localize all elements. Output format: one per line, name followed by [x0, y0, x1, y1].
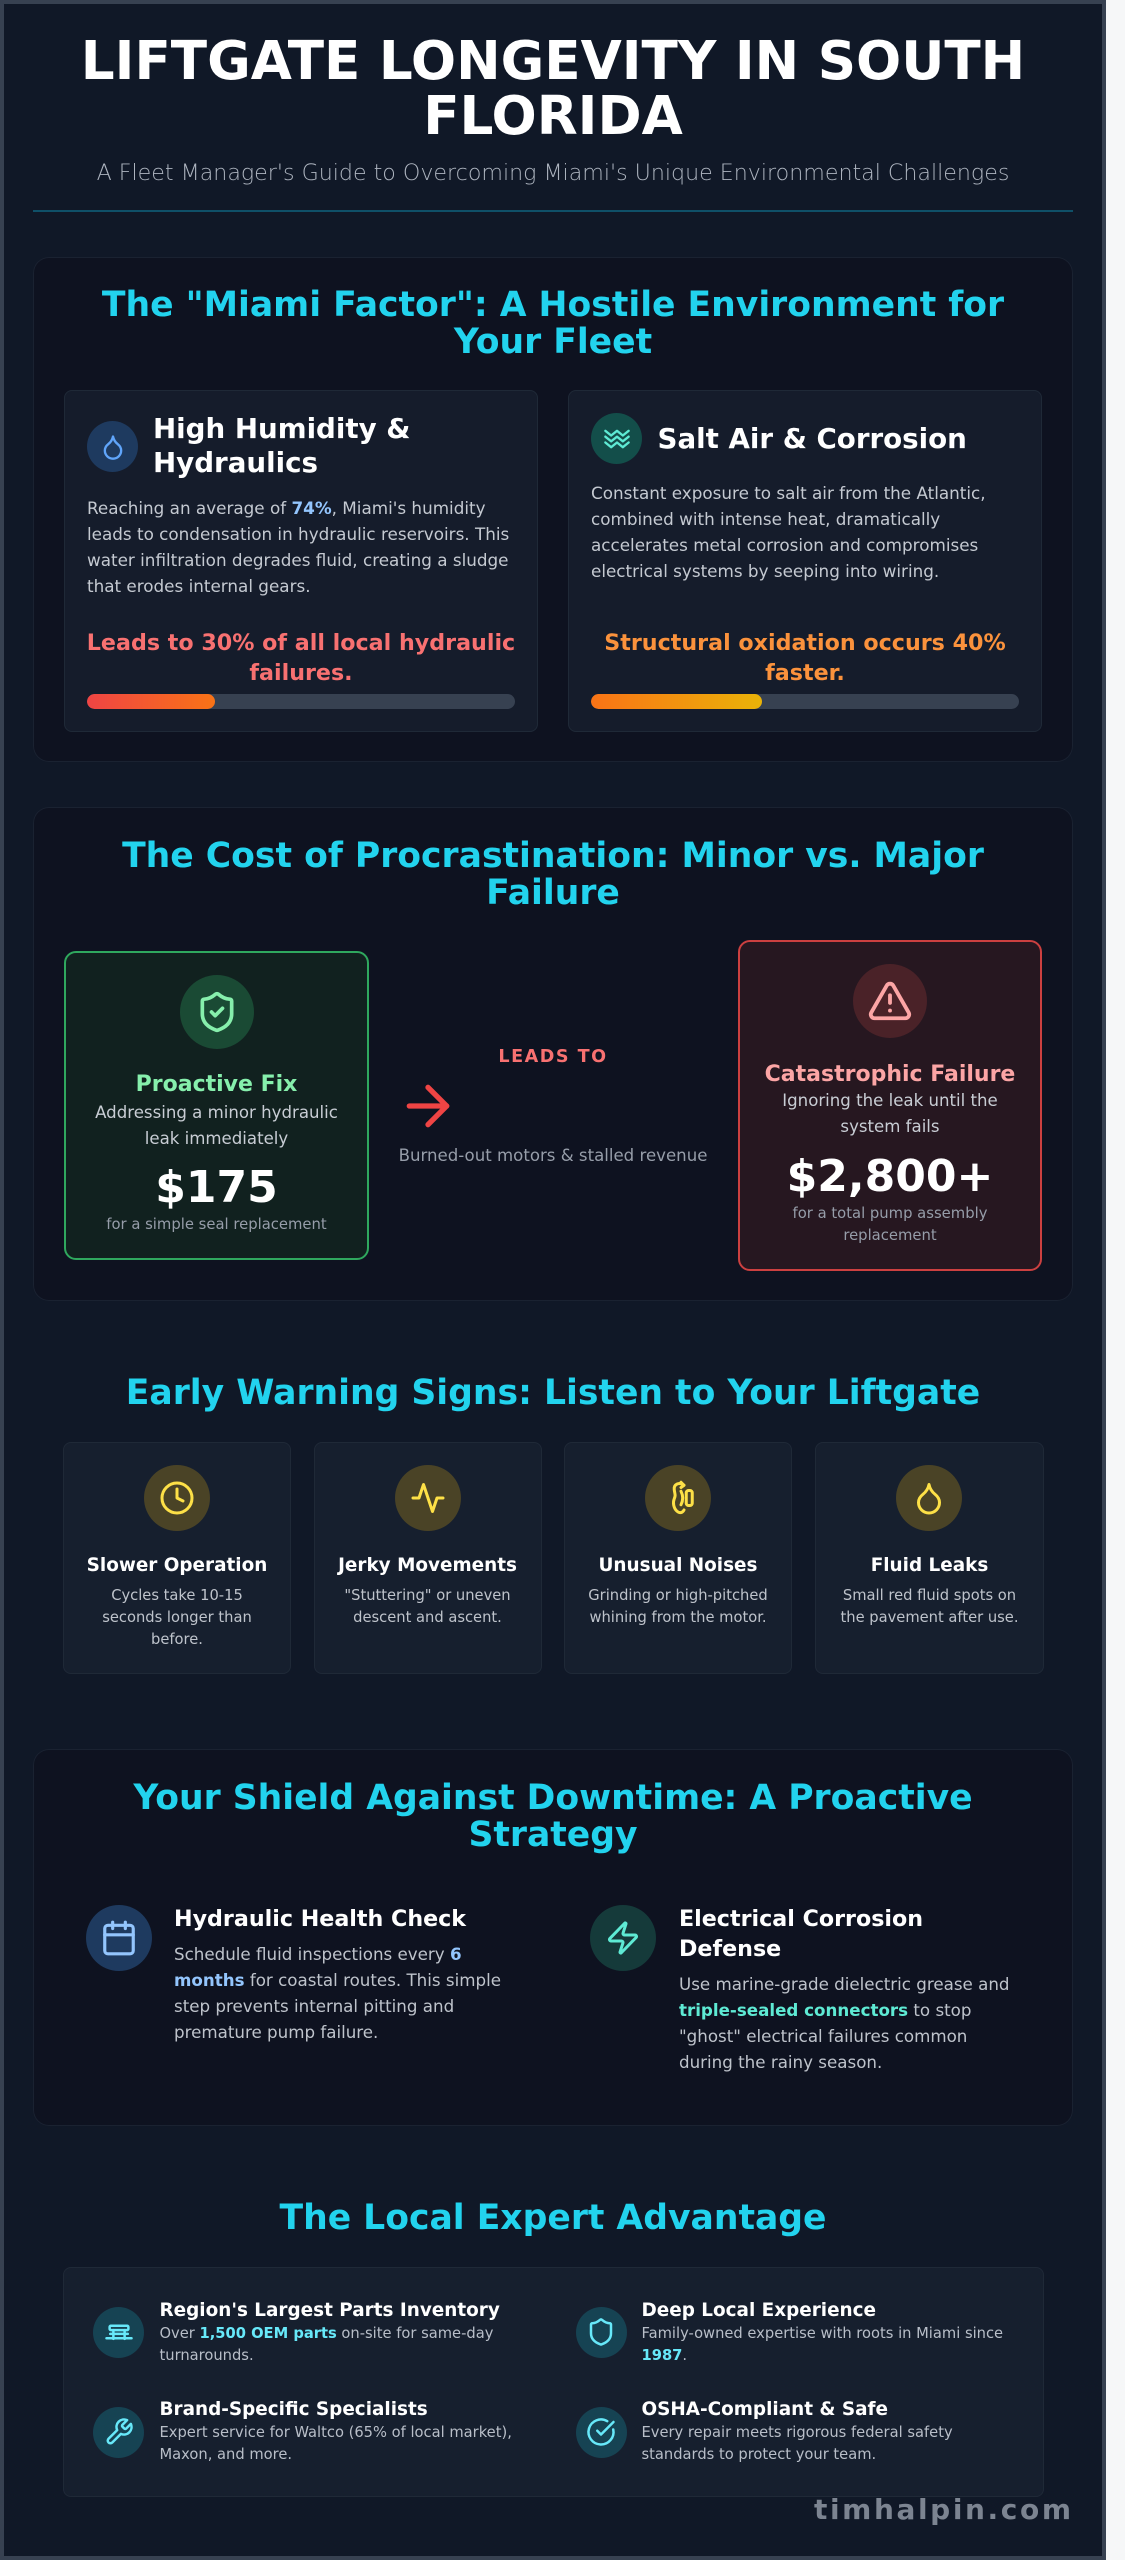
card text: [840, 1587, 1018, 1626]
item text: Expert service for Waltco (65% of local market),: [160, 2424, 512, 2441]
card: Unusual Noises: [564, 1442, 792, 1674]
card text: combined with intense heat, dramatically: [591, 508, 940, 528]
item text: Family-owned expertise with roots in Miami since: [642, 2325, 1003, 2342]
card text: [95, 1102, 338, 1148]
item text: [642, 2325, 1003, 2364]
card text: system fails: [840, 1117, 940, 1136]
text: leads to: LEADS TO: [498, 1047, 608, 1067]
card text: whining from the motor.: [589, 1609, 767, 1626]
section: The Local Expert Advantage: [63, 2198, 1044, 2497]
item text: Every repair meets rigorous federal safety: [642, 2424, 953, 2441]
icon: clock: [144, 1465, 210, 1531]
card heading: Hydraulics: [153, 446, 318, 479]
icon: droplet: [896, 1465, 962, 1531]
card text: leak immediately: [145, 1128, 288, 1148]
card: Fluid Leaks: [815, 1442, 1044, 1674]
card: Proactive Fix: [64, 951, 369, 1260]
card title: Unusual Noises: [598, 1555, 757, 1576]
callout: 40 percent faster: faster.: [765, 660, 845, 686]
item: local experience: [576, 2300, 1003, 2364]
card text: electrical systems by seeping into wiring.: [591, 560, 939, 580]
card text: that erodes internal gears.: [87, 576, 311, 596]
card text: "Stuttering" or uneven: [344, 1587, 511, 1604]
strategy text: months for coastal routes. This simple: [174, 1970, 501, 1990]
icon: shield: [576, 2306, 626, 2358]
item text: 1987.: [642, 2347, 687, 2364]
card text: [87, 498, 509, 596]
strategy text: during the rainy season.: [679, 2052, 882, 2072]
heading: Cost of Procrastination: Failure: [486, 873, 620, 913]
price note: replacement: [843, 1227, 937, 1244]
icon: wrench: [93, 2406, 144, 2458]
arrow: [406, 1084, 450, 1128]
item title: Deep Local Experience: [642, 2300, 876, 2321]
panel: The Cost of Procrastination: [33, 807, 1073, 1301]
item text: Over 1,500 OEM parts on-site for same-day: [160, 2325, 493, 2342]
price note: [792, 1205, 987, 1244]
item text: [160, 2424, 512, 2463]
strategy title: [679, 1906, 923, 1962]
heading: Miami Factor: The "Miami Factor": A Hostile Environment for: [102, 285, 1004, 325]
watermark: timhalpin.com: [814, 2493, 1074, 2526]
panel: expert list: [63, 2267, 1044, 2497]
callout: 40 percent faster: [604, 630, 1006, 686]
item title: Region's Largest Parts Inventory: [160, 2300, 500, 2321]
strategy text: "ghost" electrical failures common: [679, 2026, 967, 2046]
card heading: Salt Air & Corrosion: [658, 422, 967, 455]
card: Slower Operation: [63, 1442, 291, 1674]
title: FLORIDA: [423, 85, 683, 147]
item text: turnarounds.: [160, 2347, 254, 2364]
card: Salt Air & Corrosion: [568, 390, 1042, 732]
heading: Shield Against Downtime: [133, 1778, 973, 1854]
callout: 30 percent of failures: failures.: [249, 660, 353, 686]
strategy text: step prevents internal pitting and: [174, 1996, 454, 2016]
strategy text: premature pump failure.: [174, 2022, 378, 2042]
card text: seconds longer than: [102, 1609, 252, 1626]
card text: before.: [151, 1631, 203, 1648]
icon: noise: [645, 1465, 711, 1531]
card text: accelerates metal corrosion and compromises: [591, 534, 978, 554]
item text: standards to protect your team.: [642, 2446, 876, 2463]
card text: Addressing a minor hydraulic: [95, 1102, 338, 1122]
heading: Shield Against Downtime: Strategy: [468, 1814, 638, 1854]
icon: parts: [93, 2306, 144, 2358]
icon: calendar: [86, 1905, 152, 1971]
card text: [591, 482, 986, 580]
callout: 40 percent faster: Structural oxidation occurs 40%: [604, 630, 1006, 656]
card text: [344, 1587, 511, 1626]
card: High Humidity & Hydraulics: [64, 390, 538, 732]
price note: for a simple seal replacement: [106, 1216, 327, 1233]
card title: Slower Operation: [87, 1555, 267, 1576]
progress bar: 40 percent: [591, 694, 1019, 709]
strategy text: Use marine-grade dielectric grease and: [679, 1974, 1010, 1994]
price: $2,800+: $2,800+: [787, 1151, 993, 1202]
callout: 30 percent of failures: [87, 630, 515, 686]
card text: [782, 1091, 998, 1136]
strategy title: Electrical Corrosion: [679, 1906, 923, 1932]
card title: Catastrophic Failure: [765, 1062, 1015, 1086]
icon: warning triangle: [853, 964, 927, 1038]
card text: Constant exposure to salt air from the Atlantic,: [591, 482, 986, 502]
icon: lightning bolt: [590, 1905, 656, 1971]
item title: OSHA-Compliant & Safe: [642, 2399, 888, 2420]
heading: Local Expert Advantage: The Local Expert Advantage: [279, 2198, 827, 2238]
card text: [102, 1587, 252, 1648]
strategy title: Defense: [679, 1936, 781, 1962]
heading: Miami Factor: Your Fleet: [454, 322, 652, 362]
card text: [588, 1587, 768, 1626]
card text: descent and ascent.: [353, 1609, 502, 1626]
card text: Reaching an average of 74%, Miami's humidity: [87, 498, 486, 518]
heading: Cost of Procrastination: The Cost of Procrastination: Minor vs. Major: [122, 836, 984, 876]
price: $175: $175: [155, 1162, 278, 1213]
card title: Jerky Movements: [338, 1555, 517, 1576]
text: consequences: Burned-out motors & stalled revenue: [399, 1146, 707, 1165]
strategy text: [679, 1974, 1010, 2072]
card text: Ignoring the leak until the: [782, 1091, 998, 1110]
panel: Your Shield Against Downtime: [33, 1749, 1073, 2126]
card: Catastrophic Failure: [738, 940, 1042, 1271]
card heading: [153, 412, 410, 479]
progress bar: 30 percent: [87, 694, 515, 709]
subtitle: A Fleet Manager's Guide to Overcoming Miami's Unique Environmental Challenges: [97, 160, 1009, 186]
card text: Small red fluid spots on: [843, 1587, 1016, 1604]
card heading: High Humidity &: [153, 412, 410, 445]
item: OSHA compliance: [576, 2399, 953, 2463]
item: specialists: [93, 2399, 512, 2463]
strategy: Electrical Corrosion Defense: [590, 1905, 1010, 2072]
icon: shield check: [180, 975, 254, 1049]
heading: Cost of Procrastination: [122, 836, 984, 913]
card text: the pavement after use.: [840, 1609, 1018, 1626]
item text: Maxon, and more.: [160, 2446, 292, 2463]
section: Early Warning Signs: [63, 1373, 1044, 1674]
card text: Grinding or high-pitched: [588, 1587, 768, 1604]
card: Jerky Movements: [314, 1442, 542, 1674]
heading: Shield Against Downtime: Your Shield Against Downtime: A Proactive: [133, 1778, 973, 1818]
title: [81, 30, 1025, 147]
callout: 30 percent of failures: Leads to 30% of all local hydraulic: [87, 630, 515, 656]
item text: [642, 2424, 953, 2463]
strategy text: [174, 1944, 501, 2042]
card text: water infiltration degrades fluid, creating a sludge: [87, 550, 508, 570]
strategy text: Schedule fluid inspections every 6: [174, 1944, 462, 1964]
panel: The Miami Factor: [33, 257, 1073, 762]
price note: for a total pump assembly: [793, 1205, 987, 1222]
icon: waves: [591, 413, 642, 464]
strategy title: Hydraulic Health Check: [174, 1906, 466, 1932]
item text: [160, 2325, 493, 2364]
icon: check circle: [576, 2406, 626, 2458]
card title: Proactive Fix: [136, 1072, 297, 1096]
heading: Miami Factor: [102, 285, 1004, 362]
item: parts inventory: [93, 2300, 500, 2364]
card text: Cycles take 10-15: [111, 1587, 243, 1604]
title: LIFTGATE LONGEVITY IN SOUTH: [81, 30, 1025, 92]
card text: leads to condensation in hydraulic reservoirs. This: [87, 524, 509, 544]
item title: Brand-Specific Specialists: [160, 2399, 428, 2420]
icon: droplet: [87, 421, 138, 472]
icon: activity: [394, 1465, 460, 1531]
card title: Fluid Leaks: [871, 1555, 988, 1576]
heading: Early Warning Signs: Early Warning Signs: Listen to Your Liftgate: [126, 1373, 980, 1413]
strategy: Hydraulic Health Check: [86, 1905, 501, 2042]
strategy text: triple-sealed connectors to stop: [679, 2000, 971, 2020]
